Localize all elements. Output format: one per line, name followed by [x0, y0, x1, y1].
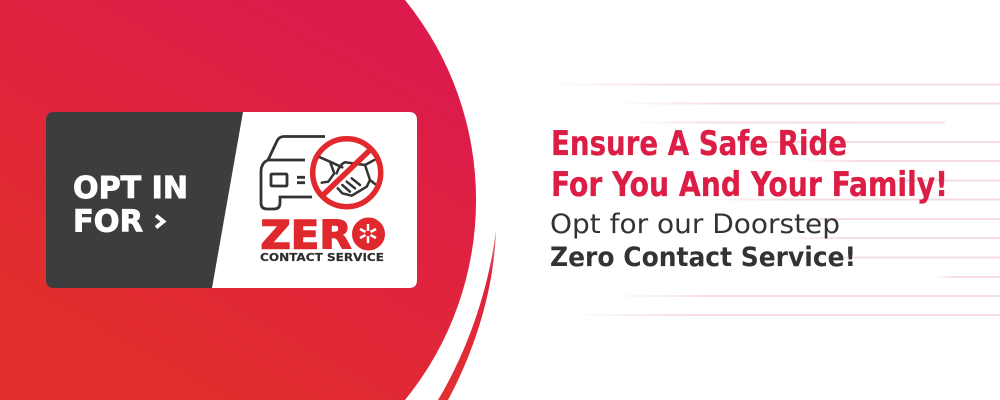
heading	[551, 124, 948, 205]
logo word: contact service: CONTACT SERVICE	[260, 251, 384, 264]
subheading	[550, 209, 856, 273]
background speed lines	[545, 84, 1000, 316]
card dark section	[46, 112, 243, 288]
card white section	[205, 112, 417, 288]
logo word: zero: ZER	[260, 214, 352, 258]
red circle background	[0, 0, 476, 400]
card label	[73, 171, 188, 240]
icon: no handshake	[313, 139, 381, 207]
icon: chevron	[156, 216, 164, 228]
thin red crescent	[438, 230, 496, 400]
heading: For You And Your Family!	[551, 165, 948, 205]
card label: OPT IN	[73, 171, 188, 206]
icon: o with asterisk	[352, 217, 386, 251]
panel: opt in card	[46, 112, 417, 288]
subheading: Opt for our Doorstep	[550, 209, 840, 240]
logo: zero contact service	[260, 136, 386, 264]
heading: Ensure A Safe Ride	[551, 124, 847, 164]
icon: car outline	[261, 136, 325, 209]
card label: FOR	[73, 204, 143, 240]
subheading: Zero Contact Service!	[550, 242, 856, 273]
